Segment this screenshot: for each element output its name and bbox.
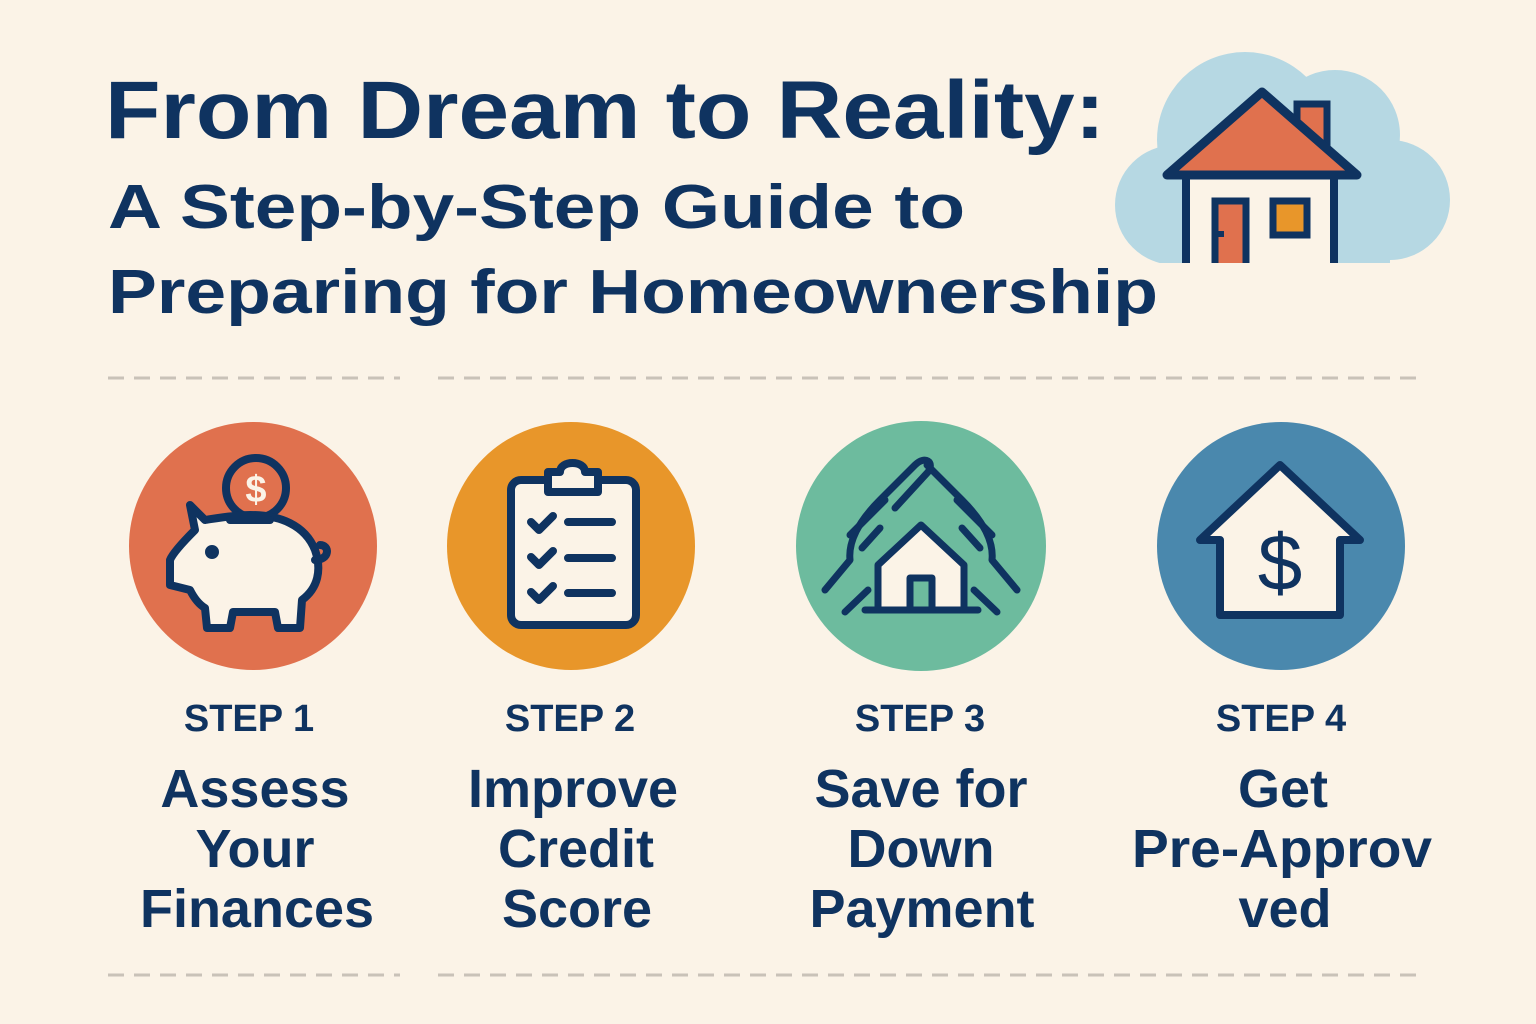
title: Preparing for Homeownership: [108, 258, 1158, 327]
step 4: ved: [1238, 879, 1332, 939]
icon: house with dollar: [1200, 465, 1360, 615]
step 3: Payment: [809, 879, 1035, 939]
step 2: Credit: [498, 819, 654, 879]
step 2: Improve: [468, 759, 678, 819]
icon: piggy bank: $: [245, 469, 267, 511]
icon: house with dollar: $: [1258, 518, 1302, 607]
title: [105, 65, 1158, 327]
step 2: Score: [502, 879, 652, 939]
step 4: Get: [1238, 759, 1328, 819]
step 3: Down: [848, 819, 994, 879]
step 1: Finances: [140, 879, 374, 939]
icon: piggy bank: [170, 458, 327, 628]
step 4: Pre-Approv: [1132, 819, 1432, 879]
icon: house in cloud: [1115, 52, 1450, 267]
step 1: Your: [196, 819, 314, 879]
step 2: [447, 422, 695, 939]
step 1: [129, 422, 377, 939]
step 1: STEP 1: [184, 698, 314, 740]
step 3: [796, 421, 1046, 939]
step 2: STEP 2: [505, 698, 635, 740]
step 3: Save for: [814, 759, 1028, 819]
step 1: Assess: [160, 759, 350, 819]
title: From Dream to Reality:: [105, 65, 1105, 156]
step 3: STEP 3: [855, 698, 985, 740]
step 4: [1132, 422, 1432, 939]
icon: clipboard: [511, 463, 636, 625]
title: A Step-by-Step Guide to: [108, 173, 965, 242]
step 4: STEP 4: [1216, 698, 1346, 740]
icon: hands over house: [825, 460, 1017, 612]
